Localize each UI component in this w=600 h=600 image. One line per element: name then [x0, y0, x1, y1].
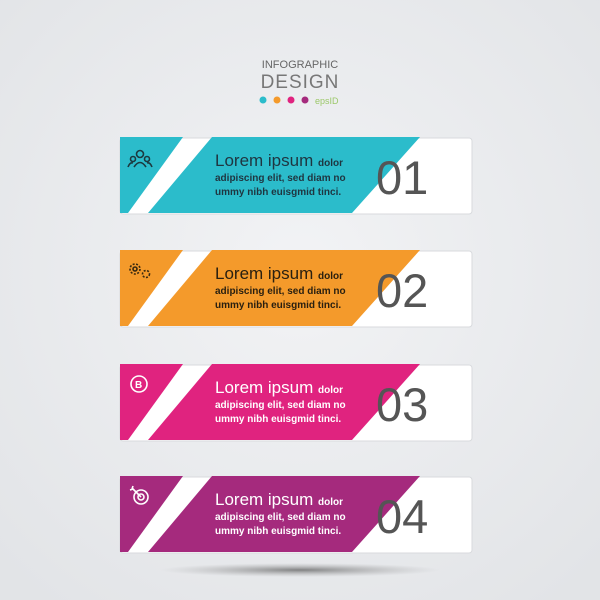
text block: adipiscing elit, sed diam no [215, 173, 346, 184]
text block: adipiscing elit, sed diam no [215, 400, 346, 411]
icon: coin [131, 376, 147, 392]
text block [215, 151, 346, 198]
text block [215, 490, 346, 537]
panel: step 04 [120, 476, 472, 553]
icon: people [128, 150, 152, 167]
text block: adipiscing elit, sed diam no [215, 512, 346, 523]
panel: step 02 [120, 250, 472, 327]
title [260, 59, 339, 106]
icon: gears [130, 264, 150, 278]
icon: coin: B [135, 380, 142, 391]
text block: adipiscing elit, sed diam no [215, 286, 346, 297]
text block: Lorem ipsum dolor [215, 264, 343, 283]
number 02: 02 [376, 264, 428, 317]
title: epsID [315, 96, 339, 106]
text block: ummy nibh euisgmid tinci. [215, 187, 341, 198]
text block: ummy nibh euisgmid tinci. [215, 414, 341, 425]
text block [215, 378, 346, 425]
text block: Lorem ipsum dolor [215, 378, 343, 397]
number 03: 03 [376, 378, 428, 431]
number 04: 04 [376, 490, 428, 543]
shadow under bottom card [160, 563, 440, 577]
title: DESIGN [261, 72, 339, 93]
icon: target [130, 486, 148, 504]
panel: step 03 [120, 364, 472, 441]
number 01: 01 [376, 151, 428, 204]
text block: Lorem ipsum dolor [215, 490, 343, 509]
text block: Lorem ipsum dolor [215, 151, 343, 170]
text block [215, 264, 346, 311]
title: INFOGRAPHIC [262, 59, 338, 71]
text block: ummy nibh euisgmid tinci. [215, 300, 341, 311]
text block: ummy nibh euisgmid tinci. [215, 526, 341, 537]
panel: step 01 [120, 137, 472, 214]
